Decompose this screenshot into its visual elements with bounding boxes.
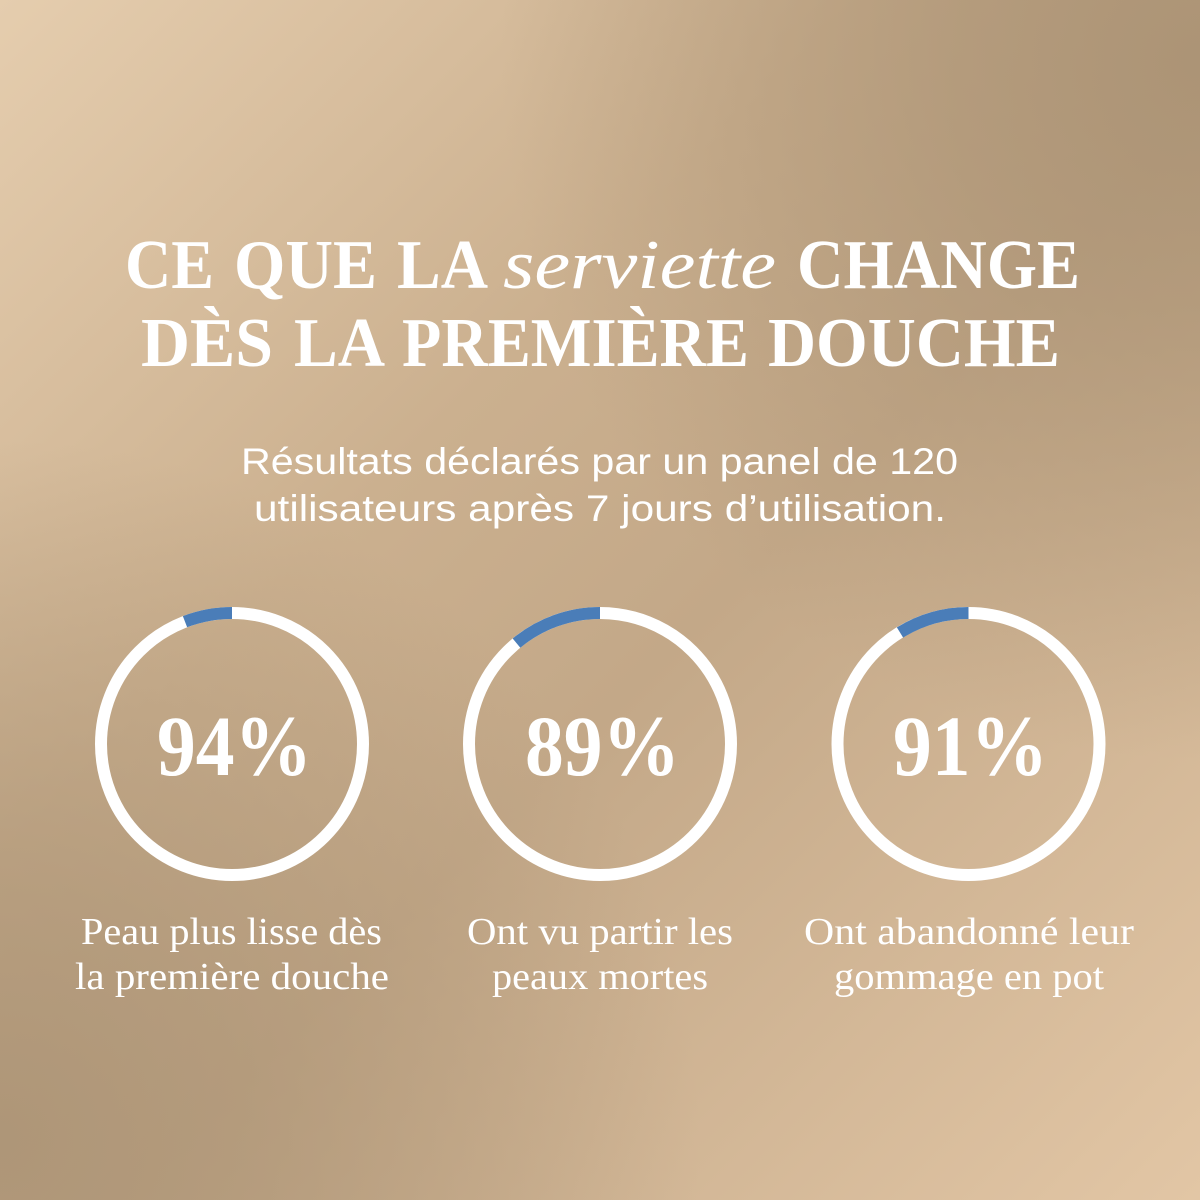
ring 89% — [469, 613, 731, 875]
title: DÈS — [141, 305, 273, 382]
subtitle: utilisateurs après 7 jours d’utilisation. — [254, 488, 946, 529]
label 89%: Ont vu partir les — [467, 911, 733, 953]
label 94% — [75, 911, 389, 998]
title: LA — [294, 305, 385, 382]
label 91%: Ont abandonné leur — [804, 911, 1134, 953]
title: DOUCHE — [768, 305, 1060, 382]
subtitle: Résultats déclarés par un panel de 120 — [241, 441, 958, 482]
subtitle — [241, 441, 958, 529]
stat: 94% — [75, 613, 389, 998]
value 91%: 91% — [893, 698, 1048, 794]
title: CHANGE — [797, 227, 1080, 304]
title: CE — [125, 227, 214, 304]
title: QUE — [234, 227, 377, 304]
label 94%: Peau plus lisse dès — [81, 911, 382, 953]
label 91%: gommage en pot — [834, 956, 1104, 998]
label 89%: peaux mortes — [492, 956, 708, 998]
title — [125, 227, 1080, 382]
stat: 89% — [467, 613, 733, 998]
label 91% — [804, 911, 1134, 998]
title: PREMIÈRE — [402, 305, 749, 382]
value 94%: 94% — [157, 698, 312, 794]
stat: 91% — [804, 613, 1134, 998]
ring 94% — [101, 613, 363, 875]
title: LA — [397, 227, 488, 304]
title: serviette — [503, 227, 776, 304]
value 89%: 89% — [525, 698, 680, 794]
label 89% — [467, 911, 733, 998]
ring 91% — [838, 613, 1100, 875]
label 94%: la première douche — [75, 956, 389, 998]
